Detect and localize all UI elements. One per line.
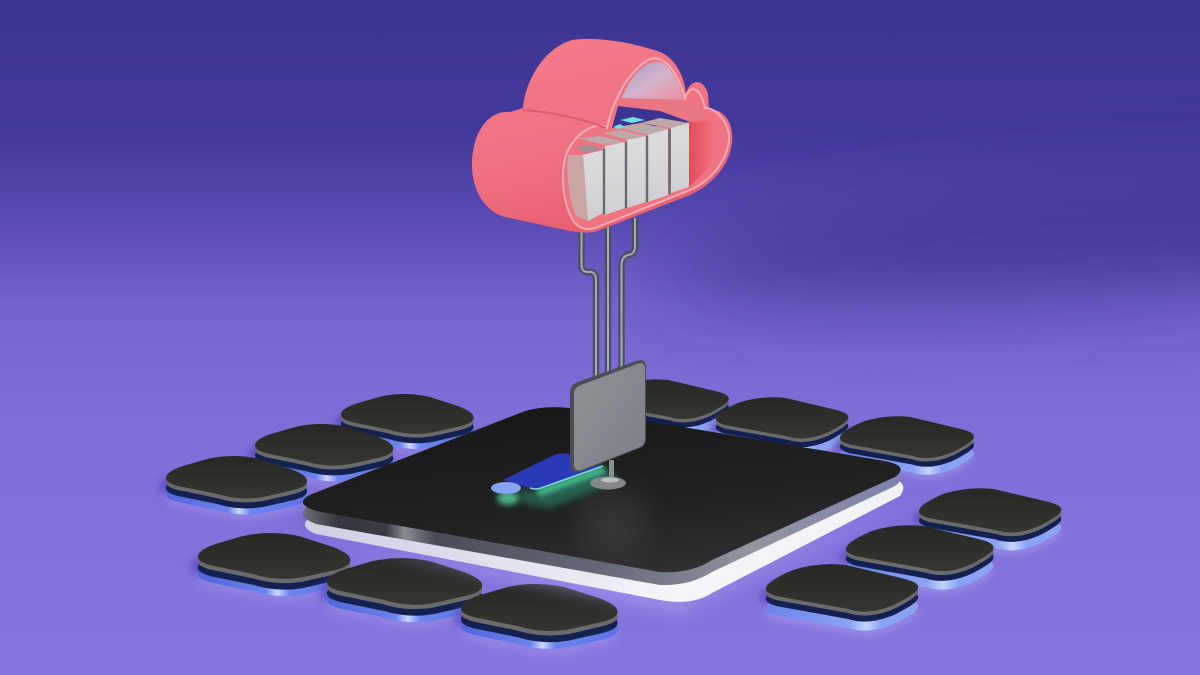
- blue slot with green glow: [491, 453, 620, 508]
- platform side band: [303, 416, 901, 585]
- light pill: [491, 482, 521, 494]
- gap showing background: [612, 106, 690, 128]
- slot edge: [530, 466, 603, 489]
- server 3: [603, 130, 646, 208]
- tile: right column rear: [912, 488, 1061, 555]
- tile: left row front: [159, 456, 307, 520]
- server 4: [617, 123, 668, 202]
- right interior shade: [689, 118, 715, 187]
- tile: top right middle: [710, 397, 848, 459]
- cloud opening: [563, 58, 729, 229]
- cloud rim highlight: [563, 58, 729, 229]
- tile: front row left: [190, 533, 350, 603]
- server 5: [640, 118, 689, 193]
- platform top face: [303, 407, 901, 572]
- platform shadow: [296, 430, 895, 600]
- tile: right column middle: [839, 525, 994, 594]
- server 1: [567, 145, 603, 221]
- inner pink band: [618, 98, 709, 122]
- tile: top right outer: [834, 416, 974, 479]
- platform white base: [305, 478, 903, 602]
- connector rods: [582, 218, 635, 385]
- tile: left row middle: [248, 424, 393, 487]
- server dividers: [604, 129, 670, 214]
- tile: front row middle: [319, 558, 482, 629]
- arch back wall: [622, 62, 684, 100]
- cloud body: [472, 39, 732, 233]
- stand reflection: [580, 495, 645, 555]
- green glow: [535, 466, 606, 496]
- teal glow: [520, 468, 620, 508]
- green glow below pill: [497, 491, 519, 505]
- panel stand: [590, 460, 626, 490]
- tile: front row right: [453, 584, 618, 656]
- tile: rear, behind platform: [595, 379, 729, 439]
- platform glow: [320, 500, 910, 612]
- lobe crease: [523, 110, 606, 128]
- tile: left row rear: [334, 394, 474, 455]
- cyan indicator lights: [613, 117, 645, 129]
- central platform: [296, 407, 910, 612]
- cloud: [472, 39, 732, 233]
- server 2: [578, 136, 625, 215]
- tile: right column front: [759, 564, 918, 636]
- grey chip panel: [570, 360, 646, 473]
- slot: [503, 453, 600, 488]
- background shadow band at right: [657, 156, 1200, 324]
